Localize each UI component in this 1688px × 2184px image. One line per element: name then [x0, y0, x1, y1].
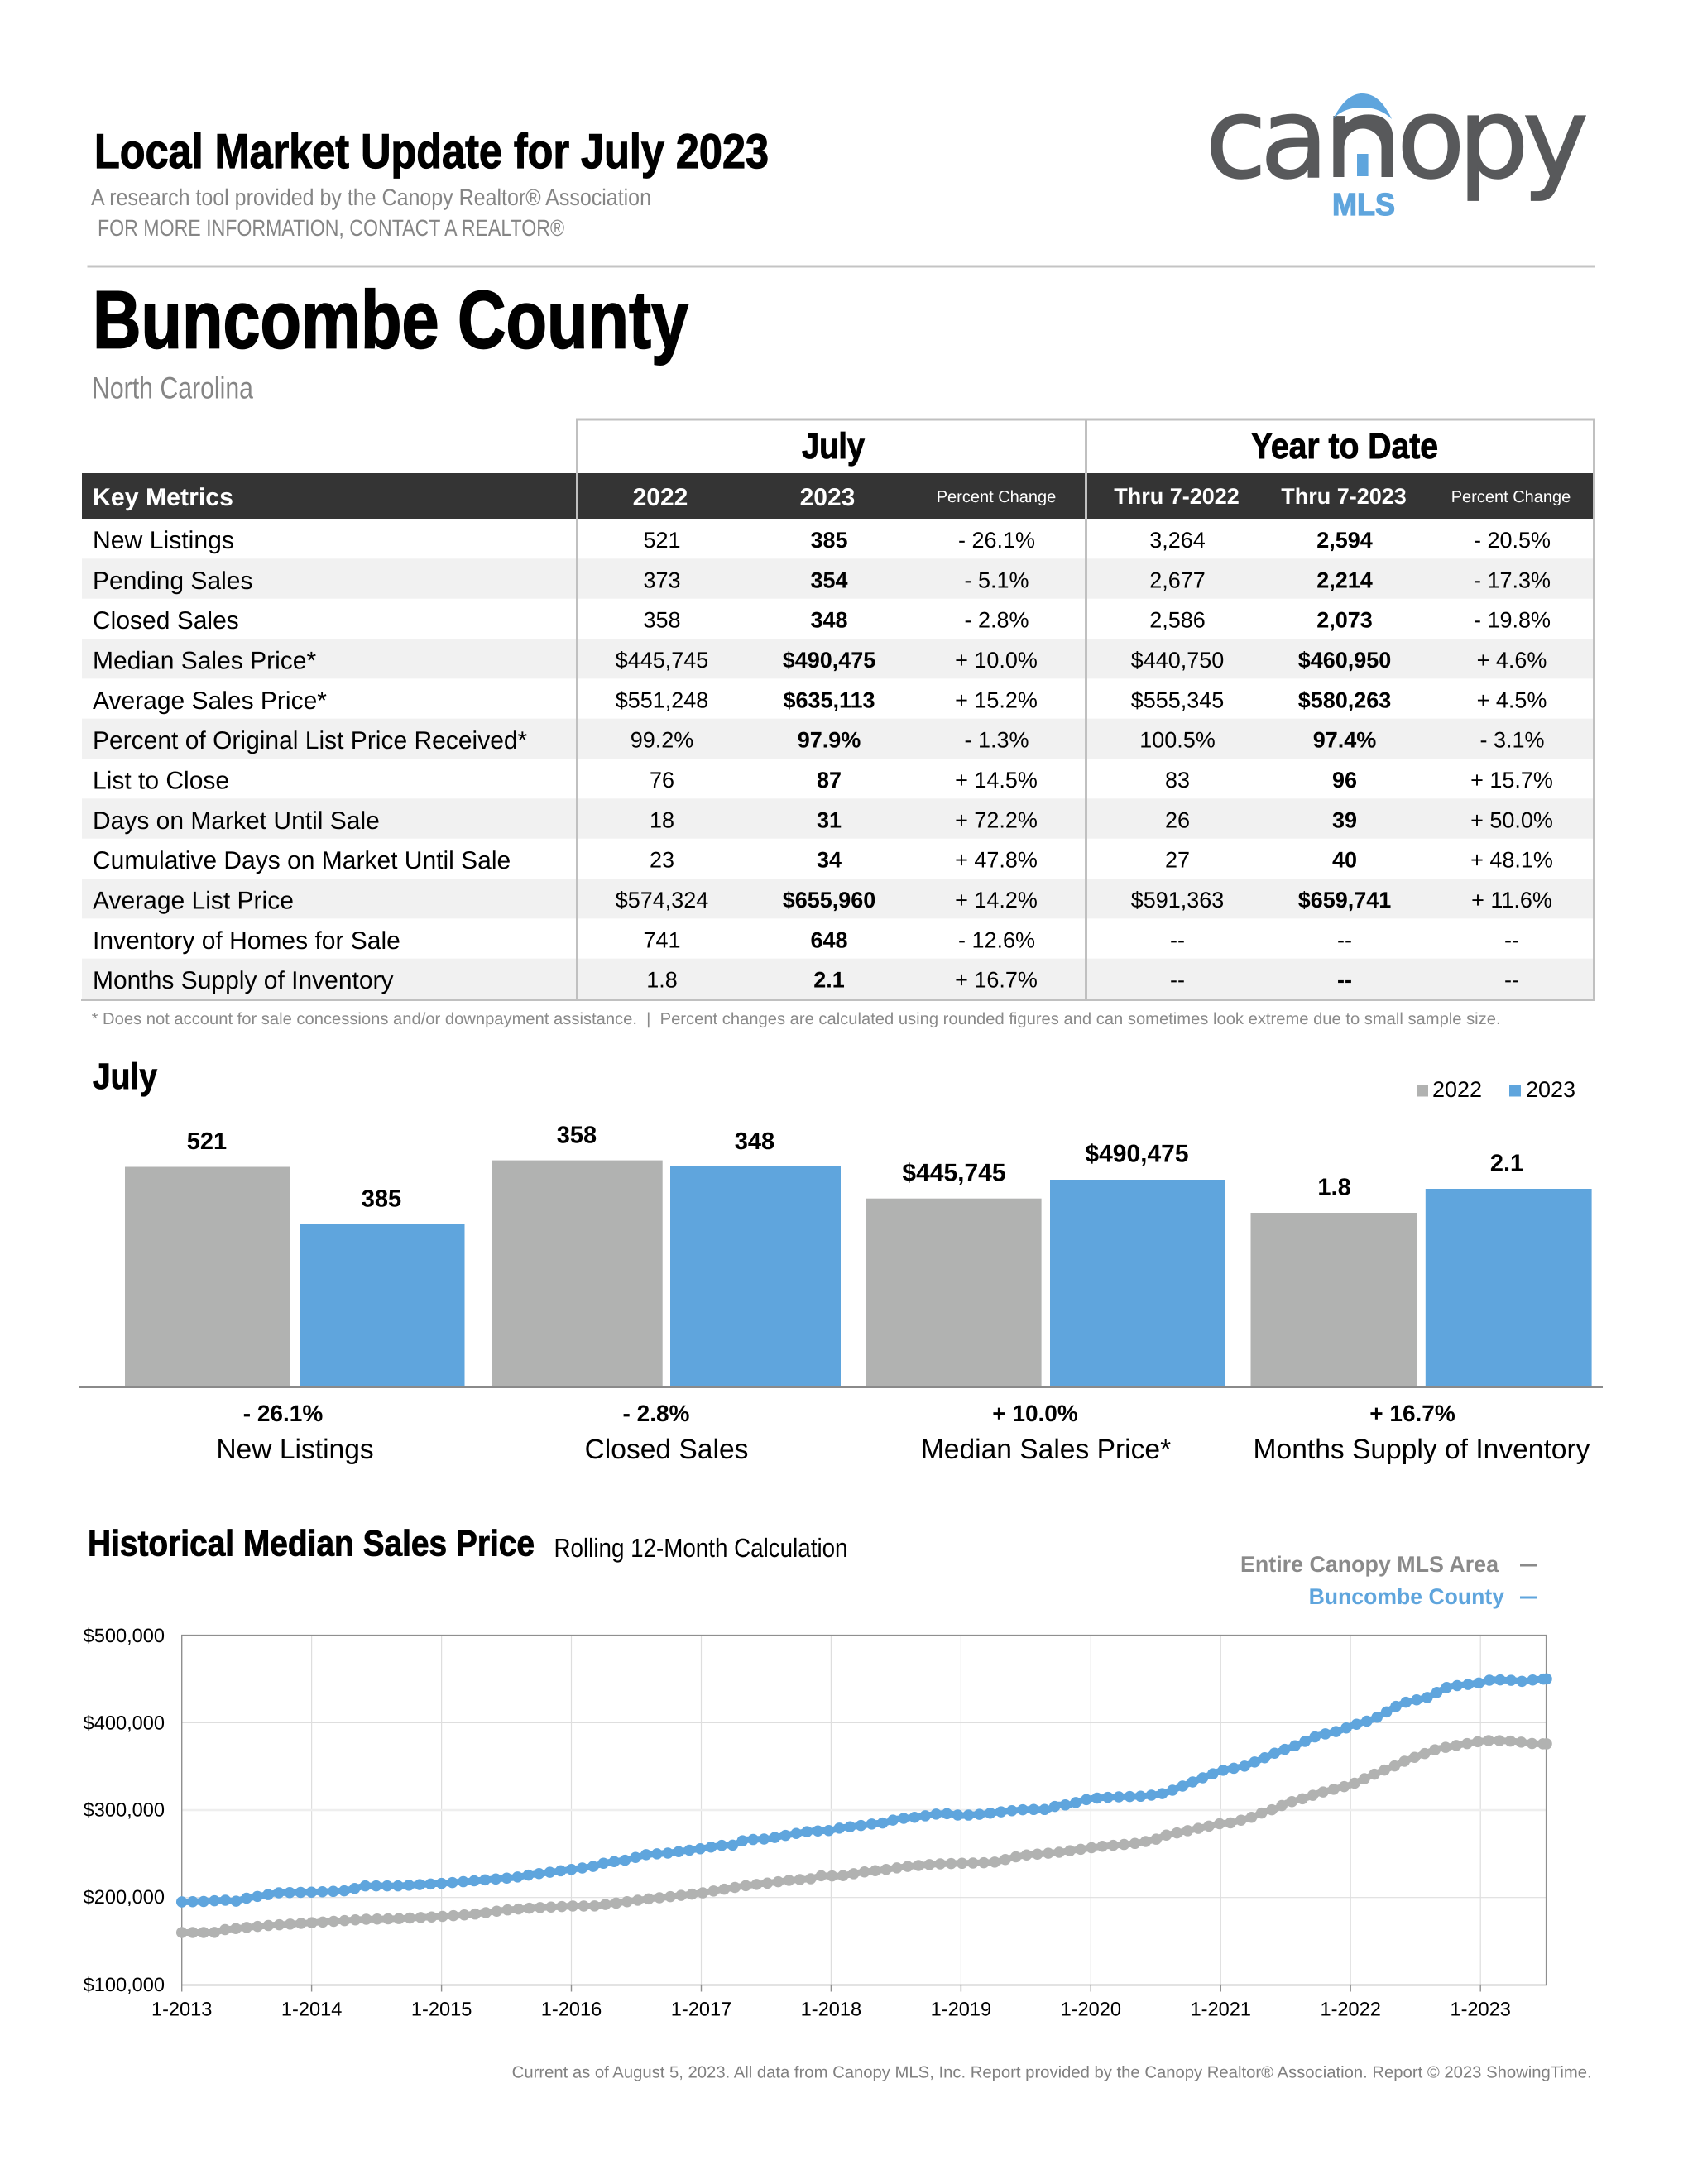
row: Cumulative Days on Market Until Sale: 40: [1332, 848, 1357, 873]
legend: bar chart years: 2023: [1526, 1077, 1575, 1102]
row: Closed Sales: - 2.8%: [964, 608, 1029, 633]
y axis labels: $500,000: [84, 1626, 165, 1647]
row: Days on Market Until Sale: 31: [817, 807, 842, 832]
row: New Listings: 2,594: [1316, 528, 1373, 553]
row: Days on Market Until Sale: + 72.2%: [955, 807, 1038, 832]
row: List to Close: 96: [1332, 768, 1357, 793]
row: Average List Price: + 11.6%: [1471, 888, 1552, 912]
row: Average List Price: $574,324: [616, 888, 708, 912]
row: Cumulative Days on Market Until Sale: + 48.1%: [1470, 848, 1553, 873]
bars: Median Sales Price: [866, 1141, 1225, 1387]
table zebra rows: [82, 558, 1595, 999]
bars: Closed Sales: 358: [557, 1123, 597, 1149]
category label: New Listings: [216, 1401, 374, 1465]
category label: Median Sales Price: Median Sales Price*: [921, 1434, 1171, 1465]
row: Pending Sales: 2,677: [1149, 568, 1206, 592]
category label: Months Supply of Inventory: + 16.7%: [1369, 1401, 1455, 1426]
category label: Months Supply of Inventory: Months Supply of Inventory: [1254, 1434, 1590, 1465]
row: List to Close: + 15.7%: [1470, 768, 1553, 793]
row: Average Sales Price: Average Sales Price*: [93, 687, 327, 715]
row: Pending Sales: [93, 568, 1551, 595]
row: Cumulative Days on Market Until Sale: 27: [1165, 848, 1190, 873]
logo: Canopy MLS: n: [1321, 74, 1404, 204]
legend: bar chart years: 2022: [1432, 1077, 1482, 1102]
x axis labels: 1-2020: [1061, 2000, 1121, 2021]
table frame: [81, 419, 1594, 999]
row: Inventory of Homes for Sale: --: [1504, 927, 1519, 952]
row: Months Supply of Inventory: 2.1: [813, 968, 845, 993]
line chart: historical median sales price: [84, 1626, 1552, 2021]
row: Days on Market Until Sale: 39: [1332, 807, 1357, 832]
row: Pending Sales: 373: [643, 568, 681, 592]
subtitle: research tool line: A research tool provided by the Canopy Realtor® Association: [91, 184, 651, 210]
table header bar: Thru 7-2023: [1281, 484, 1407, 509]
heading: Historical Median Sales Price: Historical Median Sales Price: [88, 1524, 535, 1564]
row: Cumulative Days on Market Until Sale: Cumulative Days on Market Until Sale: [93, 847, 511, 874]
row: Median Sales Price: + 4.6%: [1477, 648, 1547, 673]
row: Percent of Original List Price Received: Percent of Original List Price Received*: [93, 727, 528, 754]
row: Months Supply of Inventory: + 16.7%: [955, 968, 1038, 993]
category label: Months Supply of Inventory: [1254, 1401, 1590, 1465]
row: Percent of Original List Price Received: 97.4%: [1313, 728, 1376, 753]
table header bar: 2023: [800, 484, 855, 511]
row: Percent of Original List Price Received: [93, 727, 1545, 754]
logo: Canopy MLS: [1206, 74, 1589, 223]
subtitle: contact line: FOR MORE INFORMATION, CONTACT A REALTOR®: [98, 215, 564, 241]
row: Inventory of Homes for Sale: 648: [810, 927, 848, 952]
row: Inventory of Homes for Sale: --: [1170, 927, 1185, 952]
x axis labels: 1-2021: [1191, 2000, 1251, 2021]
row: New Listings: 3,264: [1149, 528, 1206, 553]
row: Average List Price: [93, 887, 1552, 915]
x axis labels: 1-2014: [281, 2000, 342, 2021]
row: Average List Price: Average List Price: [93, 887, 294, 915]
row: Percent of Original List Price Received: 100.5%: [1139, 728, 1216, 753]
row: Median Sales Price: $445,745: [616, 648, 708, 673]
x axis labels: 1-2015: [411, 2000, 472, 2021]
row: Days on Market Until Sale: 26: [1165, 807, 1190, 832]
bars: Median Sales Price: $445,745: [902, 1160, 1006, 1187]
table header bar: Percent Change: [1451, 488, 1571, 506]
table header bar: [82, 473, 1595, 519]
bars: New Listings: [125, 1128, 465, 1387]
row: New Listings: 521: [643, 528, 681, 553]
row: List to Close: 87: [817, 768, 842, 793]
row: Days on Market Until Sale: + 50.0%: [1470, 807, 1553, 832]
row: New Listings: 385: [810, 528, 848, 553]
table header bar: Percent Change: [937, 488, 1056, 506]
x axis labels: 1-2016: [541, 2000, 602, 2021]
row: Average List Price: $591,363: [1131, 888, 1224, 912]
heading: Buncombe County: Buncombe County: [93, 273, 688, 366]
row: Pending Sales: 2,214: [1316, 568, 1373, 592]
row: Cumulative Days on Market Until Sale: [93, 847, 1553, 874]
table header bar: Thru 7-2022: [1114, 484, 1240, 509]
y axis labels: $300,000: [84, 1800, 165, 1822]
row: Pending Sales: - 5.1%: [964, 568, 1029, 592]
row: New Listings: New Listings: [93, 527, 234, 554]
category label: New Listings: New Listings: [216, 1434, 374, 1465]
x axis labels: 1-2017: [671, 2000, 731, 2021]
category label: Closed Sales: [585, 1401, 748, 1465]
category label: Closed Sales: - 2.8%: [623, 1401, 690, 1426]
x axis labels: [151, 2000, 1511, 2021]
logo: Canopy MLS: c: [1206, 74, 1267, 204]
footnote: * Does not account for sale concessions and/or downpayment assistance. | Percent changes are calculated using rounded figures and can sometimes look extreme due to small sample size.: [92, 1010, 1501, 1028]
row: Days on Market Until Sale: Days on Market Until Sale: [93, 807, 380, 835]
row: Percent of Original List Price Received: - 1.3%: [964, 728, 1029, 753]
x axis labels: 1-2022: [1320, 2000, 1381, 2021]
row: Median Sales Price: $460,950: [1298, 648, 1391, 673]
category label: Median Sales Price: + 10.0%: [992, 1401, 1078, 1426]
bars: Months Supply of Inventory: 2.1: [1490, 1151, 1523, 1177]
section heading: July: July: [93, 1056, 157, 1097]
row: Pending Sales: 354: [810, 568, 848, 592]
row: Closed Sales: [93, 607, 1551, 635]
category label: New Listings: - 26.1%: [243, 1401, 323, 1426]
row: List to Close: + 14.5%: [955, 768, 1038, 793]
row: Percent of Original List Price Received: 99.2%: [631, 728, 693, 753]
row: Average List Price: + 14.2%: [955, 888, 1038, 912]
legend: line chart series: [1240, 1552, 1537, 1609]
row: Median Sales Price: $440,750: [1131, 648, 1224, 673]
bars: Months Supply of Inventory: 1.8: [1317, 1175, 1351, 1201]
row: Average Sales Price: $551,248: [616, 687, 708, 712]
bars: Closed Sales: [492, 1123, 841, 1387]
subheading: North Carolina: North Carolina: [92, 371, 253, 405]
legend: bar chart years: [1417, 1077, 1575, 1102]
series: Buncombe County: [182, 1674, 1552, 1902]
row: Percent of Original List Price Received: 97.9%: [798, 728, 861, 753]
row: Months Supply of Inventory: [93, 967, 1519, 994]
x axis labels: 1-2018: [801, 2000, 861, 2021]
row: Cumulative Days on Market Until Sale: 34: [817, 848, 842, 873]
row: Average Sales Price: $635,113: [783, 687, 875, 712]
table header bar: 2022: [633, 484, 688, 511]
series: Entire Canopy MLS Area: [182, 1738, 1552, 1933]
logo: Canopy MLS: o: [1397, 74, 1465, 204]
row: List to Close: [93, 768, 1553, 794]
row: Average Sales Price: + 4.5%: [1477, 687, 1547, 712]
row: New Listings: - 26.1%: [958, 528, 1035, 553]
bars: Closed Sales: 348: [735, 1128, 774, 1155]
legend: line chart series: Buncombe County: [1309, 1584, 1504, 1609]
row: Months Supply of Inventory: --: [1170, 968, 1185, 993]
x axis labels: 1-2023: [1450, 2000, 1511, 2021]
y axis labels: [84, 1626, 165, 1996]
logo: Canopy MLS: MLS: [1332, 188, 1395, 223]
row: Average Sales Price: $580,263: [1298, 687, 1391, 712]
y axis labels: $400,000: [84, 1712, 165, 1734]
row: Percent of Original List Price Received: - 3.1%: [1479, 728, 1545, 753]
row: Average List Price: $655,960: [783, 888, 875, 912]
row: Months Supply of Inventory: Months Supply of Inventory: [93, 967, 394, 994]
row: Days on Market Until Sale: [93, 807, 1553, 835]
row: Average Sales Price: $555,345: [1131, 687, 1224, 712]
row: Months Supply of Inventory: --: [1337, 968, 1352, 993]
row: Inventory of Homes for Sale: Inventory of Homes for Sale: [93, 927, 400, 955]
logo: Canopy MLS: p: [1458, 74, 1529, 204]
row: List to Close: 76: [650, 768, 674, 793]
logo: Canopy MLS: y: [1523, 74, 1589, 204]
row: List to Close: List to Close: [93, 768, 229, 794]
row: Closed Sales: 358: [643, 608, 681, 633]
bars: Months Supply of Inventory: [1251, 1151, 1592, 1387]
table header bar: Key Metrics: [93, 484, 233, 511]
y axis labels: $200,000: [84, 1887, 165, 1909]
row: Median Sales Price: + 10.0%: [955, 648, 1038, 673]
column group heading: July: July: [802, 426, 865, 467]
row: Closed Sales: 2,586: [1149, 608, 1206, 633]
title: Local Market Update: Local Market Update for July 2023: [94, 124, 769, 179]
row: Pending Sales: Pending Sales: [93, 568, 252, 595]
footer: data source note: Current as of August 5, 2023. All data from Canopy MLS, Inc. Report provided by the Canopy Realtor® Association. Report © 2023 ShowingTime.: [512, 2064, 1592, 2082]
logo: Canopy MLS: a: [1260, 74, 1329, 204]
row: Median Sales Price: $490,475: [783, 648, 875, 673]
row: Pending Sales: - 17.3%: [1474, 568, 1551, 592]
bars: New Listings: 385: [362, 1186, 401, 1213]
row: Closed Sales: Closed Sales: [93, 607, 239, 635]
y axis labels: $100,000: [84, 1975, 165, 1996]
legend: line chart series: Entire Canopy MLS Area: [1240, 1552, 1499, 1577]
row: Median Sales Price: Median Sales Price*: [93, 647, 316, 675]
row: Closed Sales: 2,073: [1316, 608, 1373, 633]
row: Closed Sales: - 19.8%: [1474, 608, 1551, 633]
row: Inventory of Homes for Sale: - 12.6%: [958, 927, 1035, 952]
row: Months Supply of Inventory: --: [1504, 968, 1519, 993]
bars: New Listings: 521: [187, 1128, 227, 1155]
subheading: Rolling 12-Month Calculation: Rolling 12-Month Calculation: [554, 1533, 847, 1563]
x axis labels: 1-2019: [931, 2000, 991, 2021]
row: Average Sales Price: + 15.2%: [955, 687, 1038, 712]
bars: Median Sales Price: $490,475: [1085, 1141, 1189, 1168]
row: Months Supply of Inventory: 1.8: [646, 968, 678, 993]
row: Inventory of Homes for Sale: 741: [643, 927, 681, 952]
row: Median Sales Price: [93, 647, 1547, 675]
row: List to Close: 83: [1165, 768, 1190, 793]
row: Average Sales Price: [93, 687, 1547, 715]
row: Cumulative Days on Market Until Sale: 23: [650, 848, 674, 873]
row: Average List Price: $659,741: [1298, 888, 1391, 912]
category label: Median Sales Price: [921, 1401, 1171, 1465]
category label: Closed Sales: Closed Sales: [585, 1434, 748, 1465]
row: Inventory of Homes for Sale: --: [1337, 927, 1352, 952]
row: Inventory of Homes for Sale: [93, 927, 1519, 955]
bar chart: July comparison: [79, 1123, 1603, 1465]
panel: key metrics table: [81, 419, 1595, 999]
row: New Listings: - 20.5%: [1474, 528, 1551, 553]
row: New Listings: [93, 527, 1551, 554]
row: Days on Market Until Sale: 18: [650, 807, 674, 832]
x axis labels: 1-2013: [151, 2000, 212, 2021]
column group heading: Year to Date: Year to Date: [1251, 426, 1438, 467]
row: Cumulative Days on Market Until Sale: + 47.8%: [955, 848, 1038, 873]
row: Closed Sales: 348: [810, 608, 848, 633]
